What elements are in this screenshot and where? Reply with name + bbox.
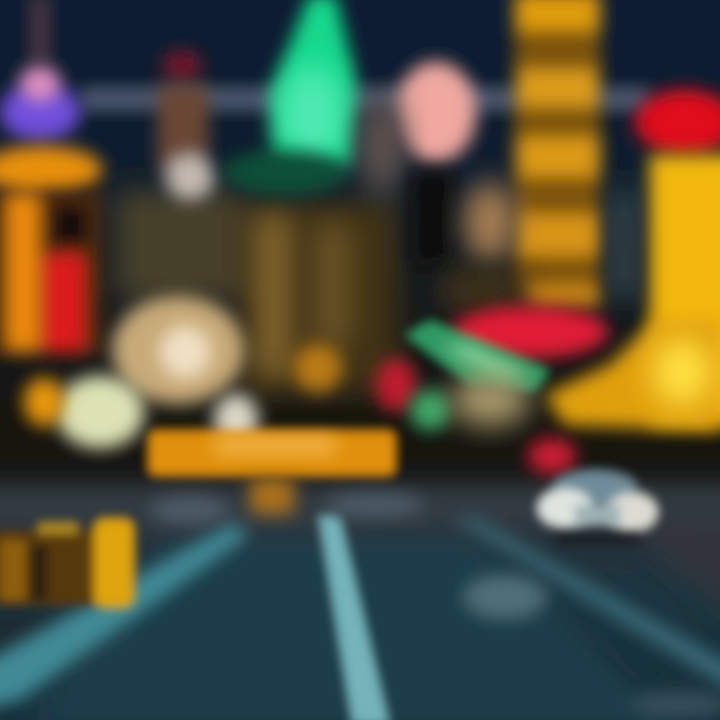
red left patch (376, 359, 416, 411)
tower mast (30, 0, 50, 65)
gold barrier (0, 518, 135, 608)
sign body (148, 430, 396, 476)
dark tower block (412, 170, 454, 265)
red roof (635, 90, 720, 154)
brown buildings (115, 190, 400, 395)
beige disk (112, 296, 244, 404)
car right lobe (606, 492, 658, 532)
orange disk (0, 146, 102, 194)
road lane lines (0, 493, 720, 720)
orange light (24, 378, 64, 426)
green lower patch (410, 390, 450, 430)
pink blob (396, 62, 476, 162)
orange street sign (148, 430, 396, 514)
white light (214, 394, 258, 446)
red canopy (452, 306, 608, 358)
road surface (0, 485, 720, 720)
yellow base (545, 320, 720, 430)
left tower (0, 0, 102, 355)
bright glow (652, 338, 712, 406)
road marking (463, 575, 547, 619)
small red sign (528, 438, 576, 474)
pale green glow (56, 376, 144, 448)
right yellow tower (545, 90, 720, 430)
dark green base (223, 150, 347, 194)
overhead gray band (80, 88, 650, 110)
right lane (455, 518, 720, 695)
amber glow (294, 344, 342, 392)
orange columns (0, 190, 102, 355)
white car (537, 470, 658, 546)
spire top (272, 0, 355, 165)
green stripe (405, 320, 550, 392)
car middle (575, 505, 620, 525)
sign post (250, 478, 294, 514)
green spire (223, 0, 355, 194)
beige round sign (24, 296, 258, 448)
yellow tower body (650, 155, 720, 425)
red and green awning (376, 306, 608, 474)
gray-blue gap (610, 190, 638, 300)
car shadow (555, 532, 640, 546)
left lane (0, 522, 248, 710)
gold column (515, 0, 600, 307)
car roof (553, 470, 637, 506)
tan block beside column (464, 182, 516, 262)
car left lobe (537, 488, 593, 528)
centre lane (318, 515, 390, 720)
purple dome (0, 84, 80, 140)
red-brown tower (158, 51, 214, 200)
